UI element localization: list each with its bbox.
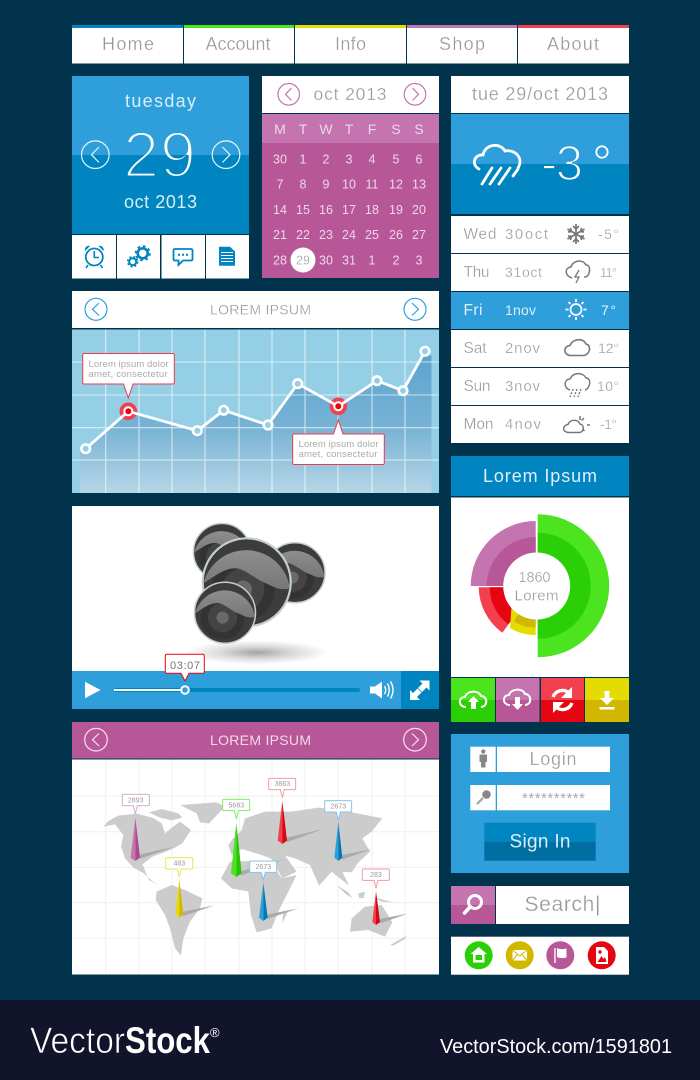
calendar days: 13 xyxy=(412,178,426,192)
icon: chat bubble xyxy=(162,235,205,278)
panel: line chart xyxy=(72,291,439,493)
icon: home xyxy=(465,941,493,969)
panel: donut chart xyxy=(451,456,629,677)
weekday header: W xyxy=(319,121,333,137)
weekday header: S xyxy=(391,121,401,137)
weekday header: T xyxy=(345,121,354,137)
callout: upper left: Lorem ipsum dolor xyxy=(88,359,168,370)
nav item: Shop xyxy=(407,25,517,64)
calendar days: 4 xyxy=(369,152,376,166)
nav item: Info: Info xyxy=(335,34,366,54)
pin: red 283 xyxy=(362,869,408,925)
calendar days: 31 xyxy=(342,254,356,268)
watermark URL: VectorStock.com/1591801 xyxy=(440,1036,672,1058)
weekday header: F xyxy=(368,121,376,137)
button: upload xyxy=(451,678,495,722)
weather date: tue 29/oct 2013 xyxy=(472,84,608,104)
map title: LOREM IPSUM xyxy=(210,732,311,748)
forecast row: Fri highlighted: Fri xyxy=(464,302,482,319)
forecast row: Mon: 4nov xyxy=(505,416,542,433)
calendar days: 11 xyxy=(366,178,379,192)
forecast row: Sun: Sun xyxy=(464,378,490,395)
chart next arrow xyxy=(404,298,426,320)
pin: blue 2673 north: 2673 xyxy=(331,804,346,811)
calendar days: 25 xyxy=(365,228,379,242)
donut chart graphic xyxy=(471,514,609,657)
panel: weather xyxy=(451,76,629,443)
chart title: LOREM IPSUM xyxy=(210,302,311,318)
calendar days: 1 xyxy=(300,152,307,166)
panel: world map xyxy=(72,722,439,974)
pin: green 5683 xyxy=(223,799,285,877)
calendar days: 3 xyxy=(416,254,423,268)
nav item: Home: Home xyxy=(102,34,154,54)
current temperature: ° xyxy=(592,135,612,191)
login field: Login xyxy=(530,749,576,769)
panel: login form xyxy=(451,734,629,873)
centre text xyxy=(514,570,558,604)
segment: red xyxy=(479,587,536,633)
icon: mail xyxy=(506,941,534,969)
calendar days: 18 xyxy=(365,203,379,217)
watermark logo: Stock xyxy=(125,1020,210,1061)
login field xyxy=(470,747,610,772)
icon: alarm clock xyxy=(72,235,116,278)
calendar days: 8 xyxy=(300,178,307,192)
red point centres xyxy=(124,402,342,415)
nav item: Account xyxy=(184,25,294,64)
pin: green 5683: 5683 xyxy=(229,802,244,809)
calendar days: 2 xyxy=(393,254,400,268)
calendar previous arrow xyxy=(278,84,300,105)
forecast row: Wed: -5° xyxy=(598,226,619,242)
next arrow xyxy=(212,141,240,168)
segment: purple xyxy=(471,521,536,586)
time tooltip: 03:07 xyxy=(170,660,200,672)
panel: search xyxy=(451,886,629,924)
calendar days: 3 xyxy=(346,152,353,166)
callout: upper left xyxy=(83,354,174,398)
pin: blue 2673 south xyxy=(250,861,298,921)
chart previous arrow xyxy=(85,298,107,320)
calendar next arrow xyxy=(404,84,426,105)
weekday header: S xyxy=(414,121,424,137)
nav item: Shop: Shop xyxy=(439,34,485,54)
forecast row: Wed: Wed xyxy=(464,226,496,243)
map next arrow xyxy=(404,728,426,751)
icon: gears xyxy=(117,235,160,278)
icon: play xyxy=(85,682,100,698)
control bar xyxy=(72,671,439,709)
calendar days: 6 xyxy=(416,152,423,166)
data line xyxy=(86,351,425,449)
icon: volume xyxy=(370,682,393,698)
forecast row: Mon: -1° xyxy=(600,416,617,432)
forecast row: Sun: 3nov xyxy=(505,378,540,395)
red highlighted points xyxy=(120,398,347,420)
month label: oct 2013 xyxy=(124,192,197,212)
calendar days: 30 xyxy=(319,254,333,268)
calendar days: 21 xyxy=(273,228,287,242)
nav item: Info xyxy=(295,25,406,64)
calendar days: 5 xyxy=(393,152,400,166)
calendar days: 10 xyxy=(342,178,356,192)
segment: green xyxy=(538,514,609,657)
sign in button xyxy=(484,823,596,861)
button: save xyxy=(585,678,629,722)
time tooltip xyxy=(165,654,204,681)
weekday header xyxy=(274,121,424,137)
calendar days: 30 xyxy=(273,152,287,166)
search text: Search| xyxy=(524,893,600,916)
nav item: About xyxy=(518,25,629,64)
pin: yellow 483: 483 xyxy=(174,861,185,868)
pin: purple 2893: 2893 xyxy=(128,797,144,804)
continents xyxy=(103,802,407,956)
forecast row: Fri highlighted: 1nov xyxy=(505,302,536,318)
forecast row: Fri highlighted: 7° xyxy=(601,302,616,318)
pin: red 3863: 3863 xyxy=(275,781,290,788)
forecast row: Thu: 11° xyxy=(600,265,617,280)
forecast row: Fri highlighted xyxy=(451,292,629,329)
forecast row: Mon xyxy=(451,406,629,443)
callout: lower right xyxy=(293,420,384,464)
pin: red 3863 xyxy=(269,778,323,844)
calendar days: 9 xyxy=(323,178,330,192)
watermark logo: ® xyxy=(210,1025,220,1040)
video image: speaker spheres xyxy=(185,524,329,664)
calendar days: 15 xyxy=(296,203,310,217)
navigation bar xyxy=(72,25,629,64)
map pins and labels xyxy=(122,778,408,925)
calendar days: 14 xyxy=(273,203,287,217)
forecast row: Wed: 30oct xyxy=(505,226,549,243)
calendar days: 16 xyxy=(319,203,333,217)
centre text: Lorem xyxy=(514,588,558,604)
forecast row: Sat xyxy=(451,330,629,367)
forecast row: Mon: Mon xyxy=(464,416,494,433)
calendar days: 26 xyxy=(389,228,403,242)
calendar days: 17 xyxy=(342,203,356,217)
panel: circular icons xyxy=(451,937,629,975)
forecast row: Thu xyxy=(451,254,629,291)
chart plot xyxy=(72,330,439,493)
calendar days: 24 xyxy=(342,228,356,242)
calendar days: 20 xyxy=(412,203,426,217)
watermark logo xyxy=(30,1020,220,1061)
segment: yellow xyxy=(510,587,536,635)
forecast row: Sun xyxy=(451,368,629,405)
calendar days: 22 xyxy=(296,228,310,242)
forecast row: Thu: 31oct xyxy=(505,264,542,280)
calendar days: 19 xyxy=(389,203,403,217)
pin: blue 2673 north xyxy=(325,801,372,861)
map body xyxy=(72,760,439,974)
password field: ********** xyxy=(522,790,585,807)
forecast row: Thu: Thu xyxy=(464,264,490,281)
previous arrow xyxy=(82,141,109,168)
progress track xyxy=(114,686,360,694)
current temperature xyxy=(541,135,612,191)
icon: image file xyxy=(588,941,616,969)
weekday header: T xyxy=(299,121,308,137)
nav item: Home xyxy=(72,25,183,64)
calendar days: 12 xyxy=(389,178,403,192)
icon: flag xyxy=(546,941,574,969)
nav item: About: About xyxy=(547,34,599,54)
sign in button: Sign In xyxy=(510,832,570,852)
calendar days xyxy=(273,152,426,268)
callout: lower right: amet, consectetur xyxy=(298,449,378,460)
watermark logo: Vector xyxy=(30,1020,125,1061)
callout: upper left: amet, consectetur xyxy=(88,369,168,380)
selected day: 29 xyxy=(296,254,310,268)
button: refresh xyxy=(541,678,584,722)
panel: date widget xyxy=(72,76,249,234)
calendar days: 27 xyxy=(412,228,426,242)
donut panel title: Lorem Ipsum xyxy=(483,466,597,486)
weekday header: M xyxy=(274,121,286,137)
icon: document xyxy=(206,235,249,278)
icon: fullscreen xyxy=(410,680,430,700)
panel: video player xyxy=(72,506,439,709)
centre text: 1860 xyxy=(518,570,550,586)
selected day xyxy=(290,248,316,272)
password field xyxy=(470,785,610,810)
forecast row: Sat: 2nov xyxy=(505,340,540,357)
panel: calendar xyxy=(262,76,439,278)
icon: magnifier xyxy=(464,896,482,913)
weekday label: tuesday xyxy=(125,91,196,111)
calendar month label: oct 2013 xyxy=(314,84,386,104)
calendar days: 28 xyxy=(273,254,287,268)
forecast row: Sat: Sat xyxy=(464,340,487,357)
calendar days: 2 xyxy=(323,152,330,166)
forecast row: Sun: 10° xyxy=(597,378,619,394)
calendar days: 1 xyxy=(369,254,376,268)
nav item: Account: Account xyxy=(206,34,270,54)
data points xyxy=(81,347,429,453)
current temperature: -3 xyxy=(541,137,583,191)
pin: red 283: 283 xyxy=(370,872,382,879)
action buttons xyxy=(451,678,629,722)
pin: blue 2673 south: 2673 xyxy=(256,864,271,871)
map previous arrow xyxy=(85,728,107,751)
icon: rain cloud xyxy=(474,145,520,184)
pin: purple 2893 xyxy=(122,794,175,861)
calendar days: 7 xyxy=(277,178,284,192)
forecast row: Wed xyxy=(451,216,629,253)
footer band xyxy=(0,1000,700,1080)
pin: yellow 483 xyxy=(166,858,214,918)
centre hole xyxy=(503,552,570,620)
calendar days: 23 xyxy=(319,228,333,242)
large date number: 29 xyxy=(123,118,196,191)
forecast row: Sat: 12° xyxy=(598,340,619,356)
callout: lower right: Lorem ipsum dolor xyxy=(298,439,378,450)
button: download xyxy=(496,678,540,722)
